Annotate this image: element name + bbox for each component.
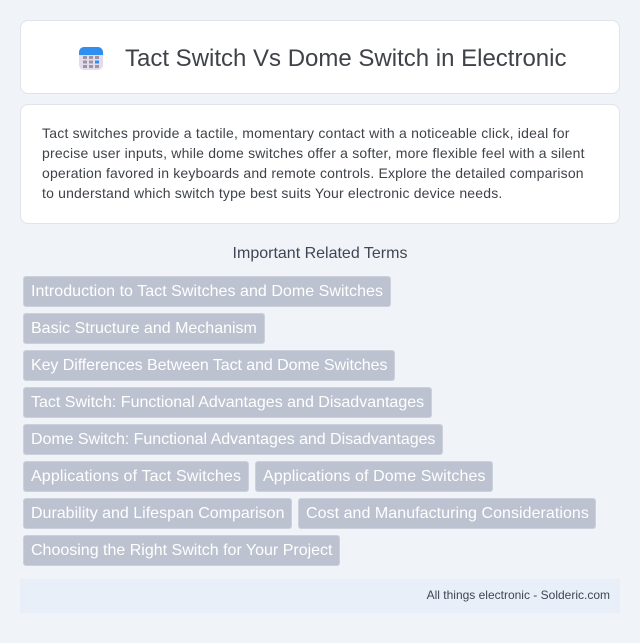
tag: cost (298, 498, 596, 529)
text block: introduction: operation favored in keyboards and remote controls. Explore the detailed comparison (42, 165, 584, 181)
tag: structure: Basic Structure and Mechanism (31, 320, 257, 337)
tag: choosing: Choosing the Right Switch for Your Project (31, 542, 332, 559)
tag: differences: Key Differences Between Tact and Dome Switches (31, 357, 387, 374)
panel: introduction (20, 104, 620, 224)
tag: choosing (23, 535, 340, 566)
tag: dome applications: Applications of Dome Switches (263, 468, 486, 485)
tag: tact advantages: Tact Switch: Functional Advantages and Disadvantages (31, 394, 424, 411)
tag: durability: Durability and Lifespan Comparison (31, 505, 284, 522)
tag: introduction (23, 276, 391, 307)
tag: tact advantages (23, 387, 432, 418)
text block: introduction (42, 125, 585, 201)
tag: cost: Cost and Manufacturing Considerations (306, 505, 589, 522)
tag: structure (23, 313, 265, 344)
text block: introduction: to understand which switch type best suits Your electronic device needs. (42, 185, 502, 201)
icon: calendar (79, 47, 103, 70)
tag: dome advantages: Dome Switch: Functional Advantages and Disadvantages (31, 431, 435, 448)
tag: tact applications (23, 461, 249, 492)
text block: introduction: Tact switches provide a tactile, momentary contact with a noticeable click, ideal for (42, 125, 570, 141)
footer (20, 579, 620, 613)
tag: differences (23, 350, 395, 381)
tag: dome applications (255, 461, 493, 492)
heading: related terms: Important Related Terms (233, 245, 407, 262)
tag: introduction: Introduction to Tact Switches and Dome Switches (31, 283, 383, 300)
footer text: All things electronic - Solderic.com (427, 588, 610, 602)
panel: related term tags (23, 276, 596, 566)
text block: introduction: precise user inputs, while dome switches offer a softer, more flexible feel with a silent (42, 145, 585, 161)
tag: dome advantages (23, 424, 443, 455)
title: Tact Switch Vs Dome Switch in Electronic (125, 45, 566, 72)
tag: tact applications: Applications of Tact Switches (31, 468, 241, 485)
panel: title card (20, 20, 620, 94)
tag: durability (23, 498, 292, 529)
